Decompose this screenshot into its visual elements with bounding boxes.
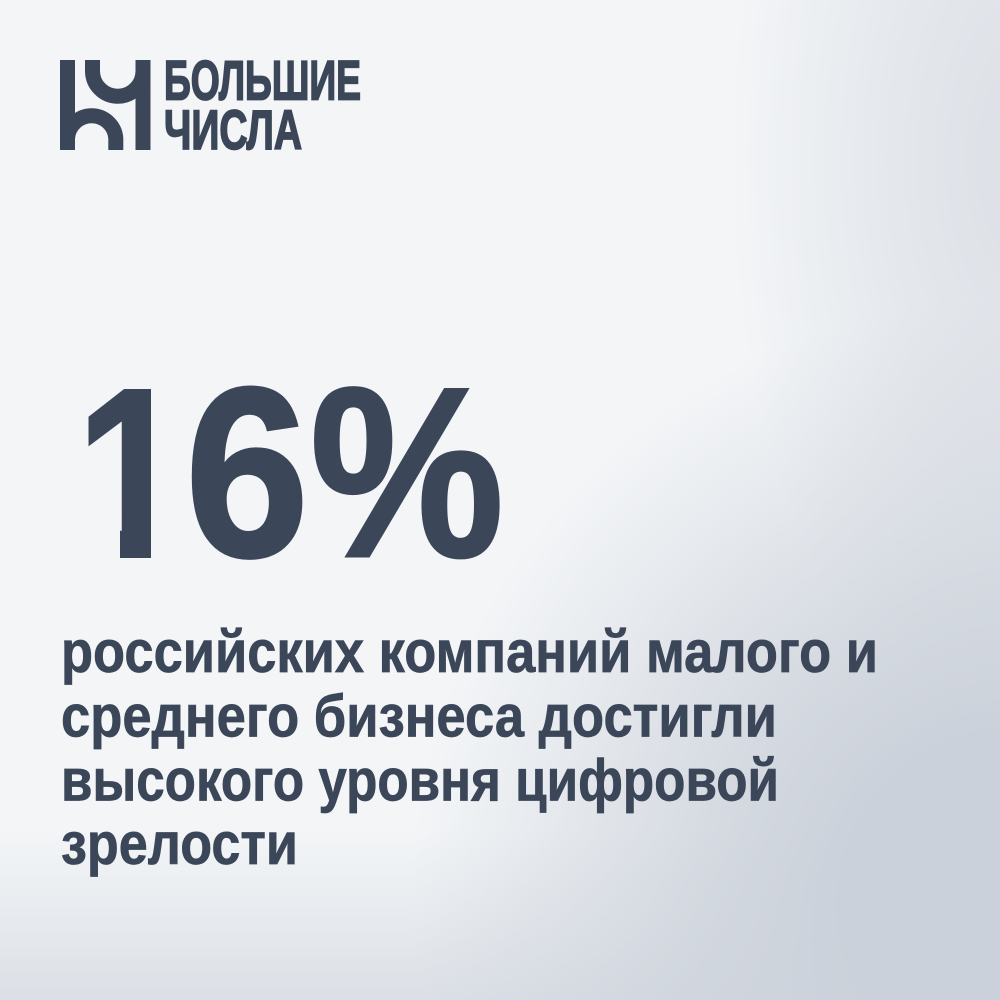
description text: среднего бизнеса достигли [61, 684, 777, 750]
description text: высокого уровня цифровой [61, 748, 779, 814]
logo wordmark [164, 48, 361, 161]
description text: российских компаний малого и [61, 619, 878, 685]
icon: logo mark [68, 60, 143, 150]
description text: зрелости [61, 811, 298, 877]
big number: 16%: 6 [185, 338, 309, 608]
description text [61, 619, 878, 877]
big number: 16% [88, 386, 500, 560]
big number: 16%: 1 [76, 339, 188, 609]
big number: 16%: % [310, 338, 504, 608]
logo [68, 48, 361, 161]
logo wordmark: ЧИСЛА [164, 98, 302, 161]
logo wordmark: БОЛЬШИЕ [164, 48, 361, 112]
